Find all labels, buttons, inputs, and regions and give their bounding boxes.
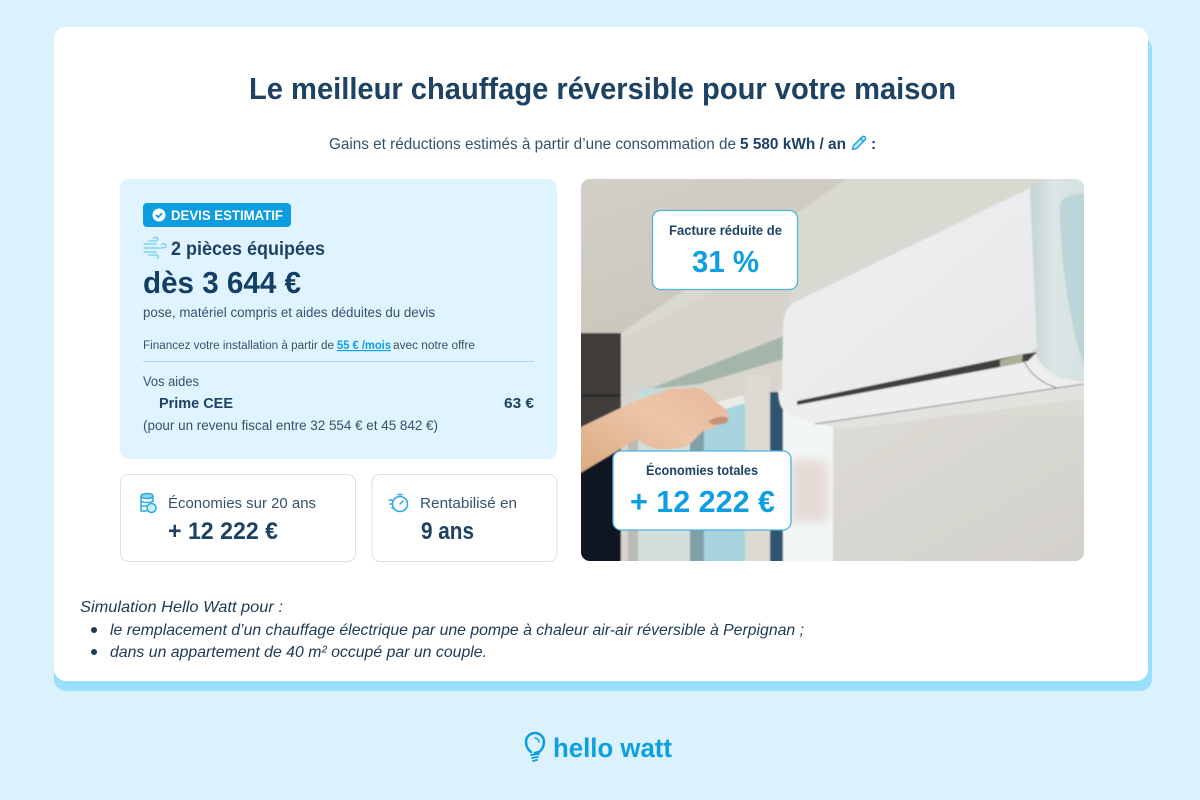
subtitle: Gains et réductions estimés à partir d’une consommation de (329, 136, 736, 153)
card: payback: 9 ans (421, 518, 474, 545)
callout: total savings (613, 451, 791, 530)
financing line: avec notre offre (393, 340, 475, 352)
icon: light bulb (526, 733, 544, 761)
remote and hand (572, 388, 745, 478)
callout: total savings: Économies totales (646, 463, 758, 478)
footnote: le remplacement d’un chauffage électrique par une pompe à chaleur air-air réversible à Perpignan ; (110, 622, 804, 639)
callout: bill reduction: Facture réduite de (669, 223, 782, 238)
photo: air conditioner and remote (572, 170, 1090, 565)
logo: hello watt: hello watt (553, 733, 672, 763)
subtitle: : (871, 136, 876, 153)
icon: pencil (852, 136, 866, 150)
callout: total savings: + 12 222 € (630, 484, 775, 519)
card shadow (54, 37, 1152, 691)
callout: bill reduction: 31 % (692, 244, 759, 279)
card: payback (372, 474, 557, 562)
card: payback: Rentabilisé en (420, 495, 517, 512)
icon: coins (141, 494, 156, 512)
aid list: Prime CEE (159, 396, 233, 412)
panel: estimate (120, 179, 557, 459)
aid list: 63 € (504, 396, 534, 412)
icon: stopwatch (389, 494, 408, 512)
callout: bill reduction (652, 210, 798, 290)
financing line: 55 € /mois (337, 340, 391, 352)
icon: air flow (144, 237, 166, 258)
heading: rooms: 2 pièces équipées (171, 238, 325, 260)
footnote (80, 599, 804, 661)
aid list: (pour un revenu fiscal entre 32 554 € et 45 842 €) (143, 418, 438, 433)
price note: pose, matériel compris et aides déduites du devis (143, 305, 435, 320)
footnote: Simulation Hello Watt pour : (80, 599, 283, 616)
aid list: Vos aides (143, 374, 199, 389)
main card (54, 27, 1148, 681)
footnote: dans un appartement de 40 m² occupé par un couple. (110, 644, 487, 661)
financing line (143, 340, 475, 352)
card: savings over 20 years (120, 474, 356, 562)
price: dès 3 644 € (143, 265, 301, 300)
subtitle: 5 580 kWh / an (740, 136, 846, 153)
card: savings over 20 years: + 12 222 € (168, 518, 278, 545)
card: savings over 20 years: Économies sur 20 ans (168, 495, 316, 512)
aid list (143, 374, 534, 433)
title: Le meilleur chauffage réversible pour votre maison (249, 71, 956, 106)
badge: devis estimatif: DEVIS ESTIMATIF (171, 207, 283, 223)
air conditioner unit (778, 179, 1088, 429)
badge: devis estimatif (143, 203, 291, 227)
financing line: Financez votre installation à partir de (143, 340, 334, 352)
